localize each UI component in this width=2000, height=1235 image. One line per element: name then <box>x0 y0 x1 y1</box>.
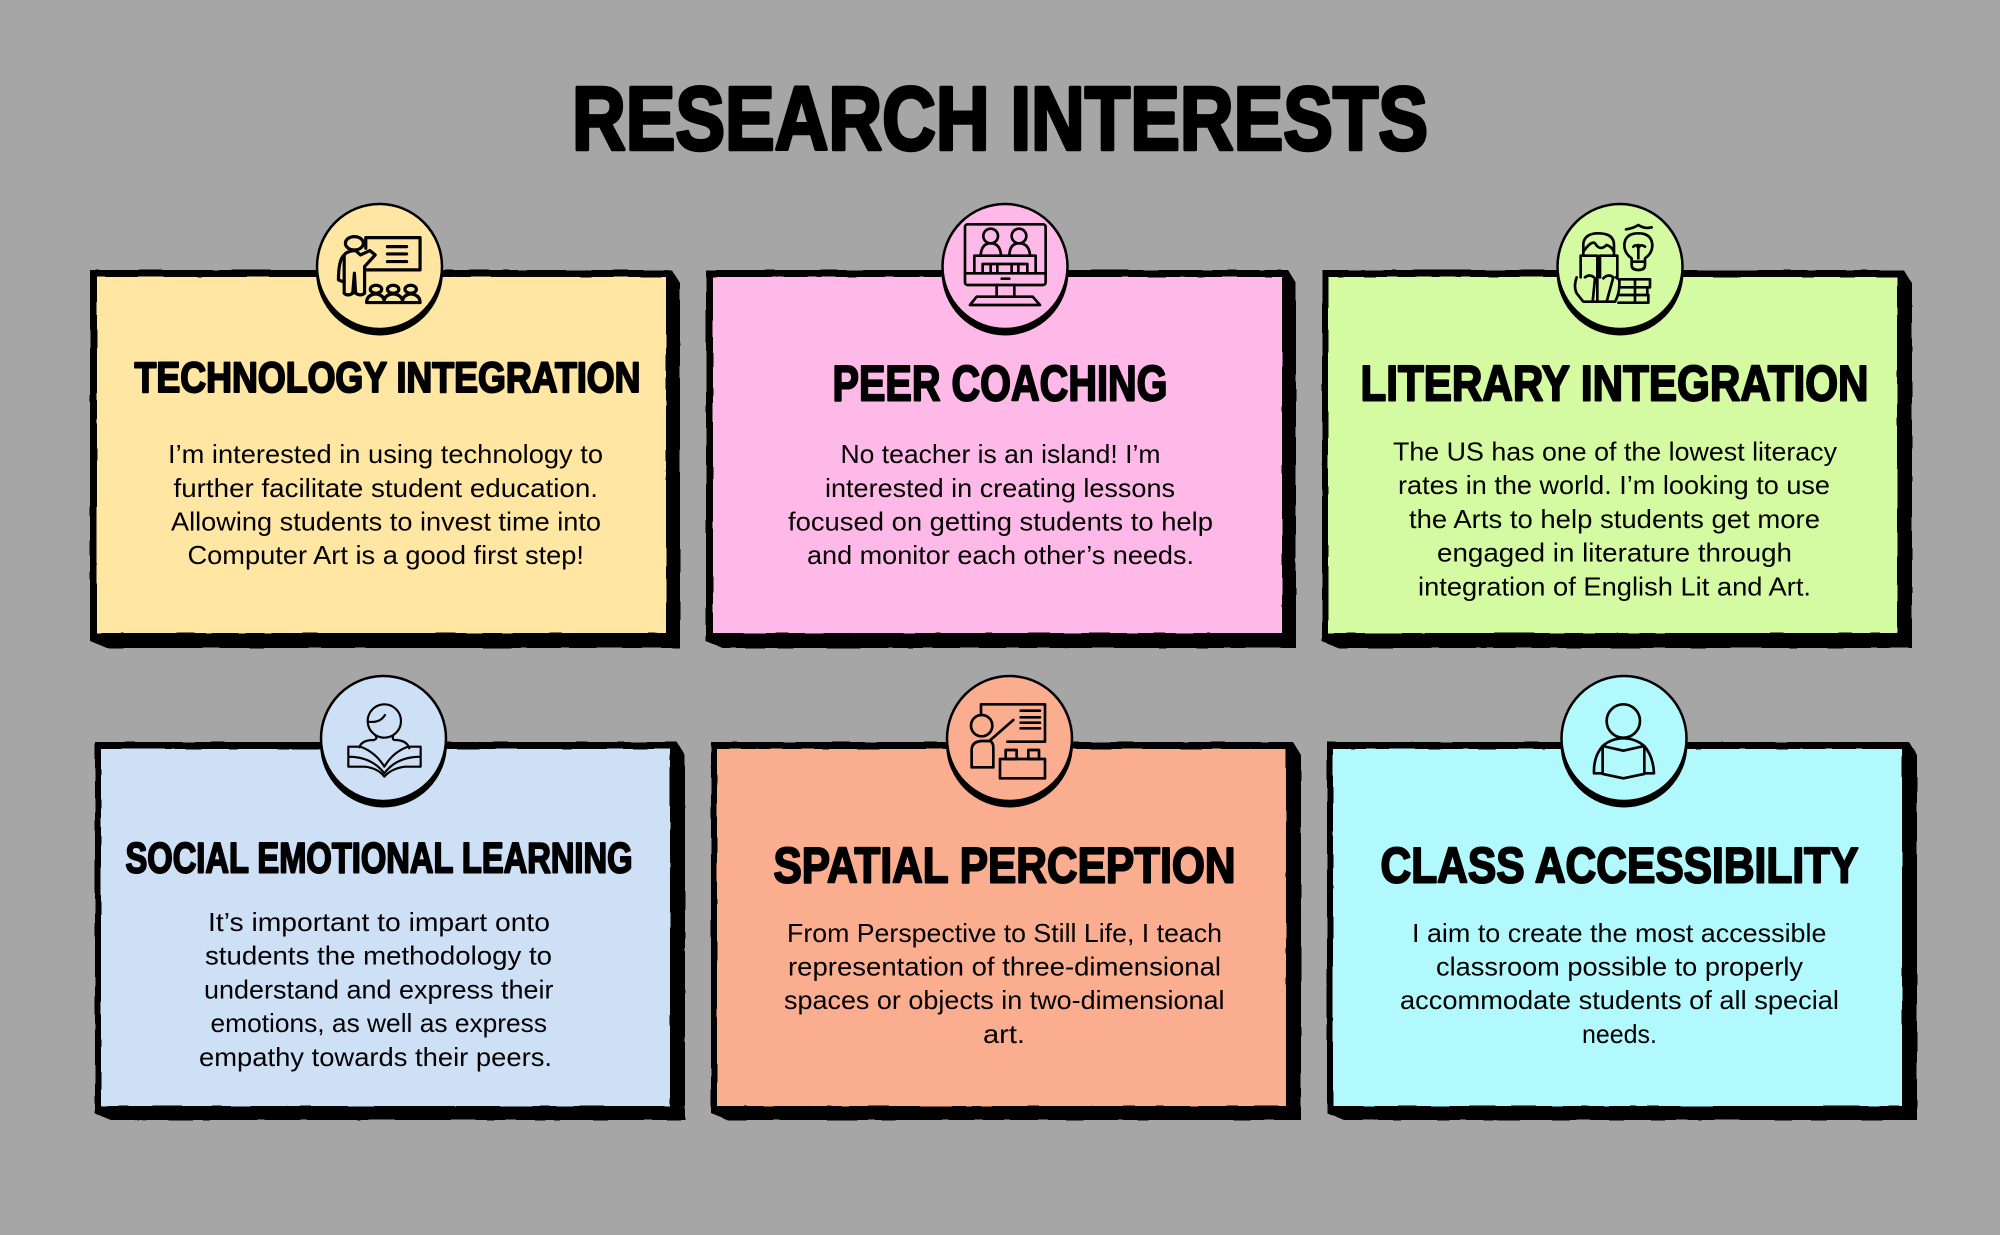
panel: literary integration <box>1322 204 1912 648</box>
card frame <box>1322 270 1912 648</box>
panel: technology integration <box>90 204 680 648</box>
body text: needs. <box>1582 1019 1657 1049</box>
card frame <box>95 742 685 1120</box>
body text: spaces or objects in two-dimensional <box>784 985 1224 1015</box>
panel: peer coaching <box>706 204 1296 648</box>
title: RESEARCH INTERESTS <box>572 70 1428 170</box>
body text: interested in creating lessons <box>825 473 1175 503</box>
card frame <box>90 270 680 648</box>
heading: SOCIAL EMOTIONAL LEARNING <box>126 834 632 882</box>
icon: video call on monitor <box>942 204 1068 336</box>
body text: integration of English Lit and Art. <box>1418 571 1811 601</box>
body text: focused on getting students to help <box>788 506 1213 536</box>
body text: rates in the world. I’m looking to use <box>1398 470 1830 500</box>
icon: student with open book <box>320 676 447 808</box>
body text: empathy towards their peers. <box>199 1042 552 1072</box>
body text <box>788 439 1213 570</box>
heading: PEER COACHING <box>832 356 1168 412</box>
body text: the Arts to help students get more <box>1409 504 1820 534</box>
body text <box>199 907 554 1072</box>
body text: engaged in literature through <box>1437 538 1792 568</box>
panel: class accessibility <box>1327 676 1917 1120</box>
body text <box>168 439 603 570</box>
body text: From Perspective to Still Life, I teach <box>787 918 1222 948</box>
body text: accommodate students of all special <box>1400 985 1839 1015</box>
heading: TECHNOLOGY INTEGRATION <box>134 354 640 402</box>
icon: reader with bulb and books <box>1556 204 1684 336</box>
body text: classroom possible to properly <box>1436 952 1803 982</box>
icon: presenter and blocks <box>946 676 1073 808</box>
card frame <box>1327 742 1917 1120</box>
body text: No teacher is an island! I’m <box>840 439 1160 469</box>
body text: understand and express their <box>204 974 554 1004</box>
body text: Allowing students to invest time into <box>171 506 601 536</box>
body text: representation of three-dimensional <box>788 952 1221 982</box>
body text: I aim to create the most accessible <box>1412 918 1826 948</box>
body text: The US has one of the lowest literacy <box>1393 436 1837 466</box>
body text: I’m interested in using technology to <box>168 439 603 469</box>
heading: CLASS ACCESSIBILITY <box>1380 838 1858 894</box>
panel: spatial perception <box>711 676 1301 1120</box>
body text: It’s important to impart onto <box>208 907 550 937</box>
body text: and monitor each other’s needs. <box>807 540 1194 570</box>
body text: emotions, as well as express <box>210 1008 547 1038</box>
panel: social emotional learning <box>95 676 685 1120</box>
body text <box>784 918 1224 1049</box>
icon: person reading <box>1560 676 1688 808</box>
body text <box>1400 918 1839 1049</box>
body text: art. <box>983 1019 1025 1049</box>
heading: LITERARY INTEGRATION <box>1360 356 1868 412</box>
icon: teacher and students <box>316 204 443 336</box>
body text: students the methodology to <box>205 941 552 971</box>
body text: further facilitate student education. <box>174 473 598 503</box>
body text <box>1393 436 1837 601</box>
card frame <box>711 742 1301 1120</box>
body text: Computer Art is a good first step! <box>188 540 584 570</box>
heading: SPATIAL PERCEPTION <box>774 838 1236 894</box>
card frame <box>706 270 1296 648</box>
